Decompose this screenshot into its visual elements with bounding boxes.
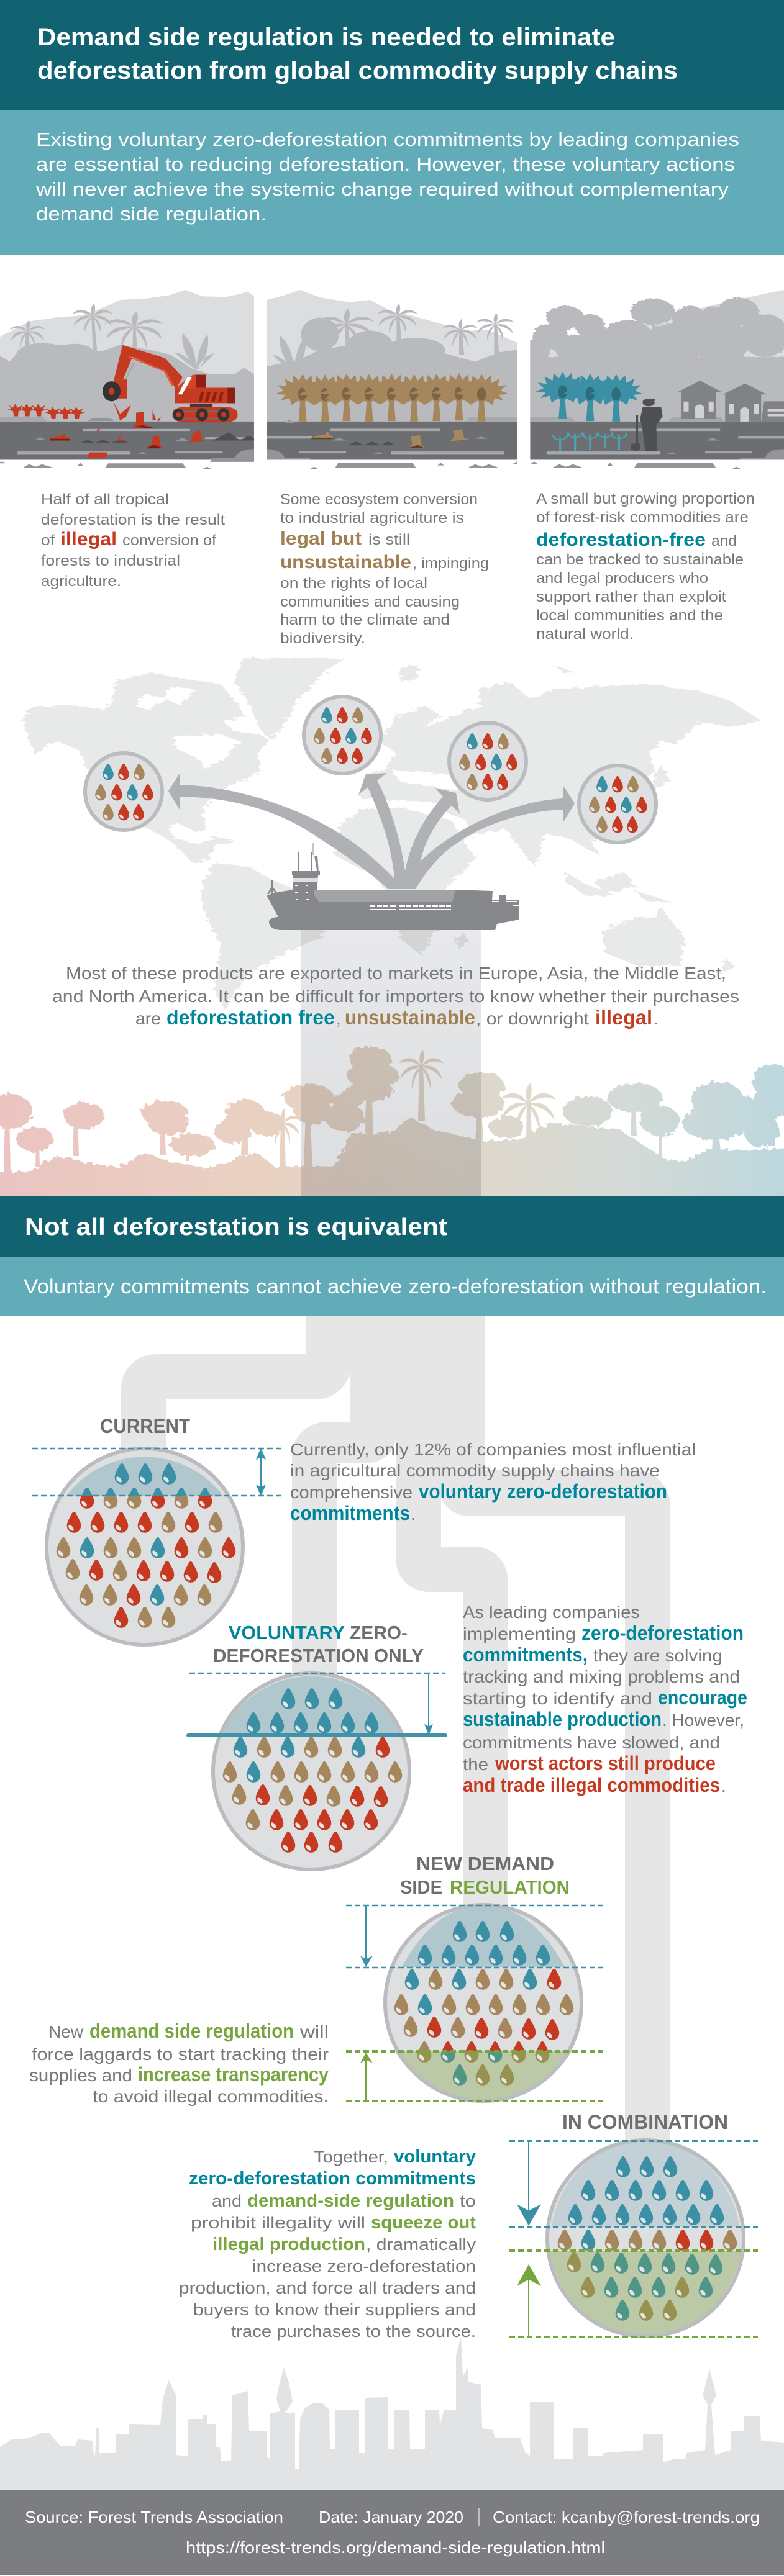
text: export markets: deforestation free xyxy=(166,1006,335,1029)
text: deforestation-free: and legal producers who xyxy=(536,570,708,587)
text: in combination: trace purchases to the source. xyxy=(231,2322,476,2341)
text: voluntary only: tracking and mixing problems and xyxy=(463,1667,740,1686)
text: export markets: , xyxy=(336,1009,341,1028)
text: illegal conversion: deforestation is the result xyxy=(41,512,225,528)
text: deforestation-free: deforestation-free xyxy=(536,530,706,550)
arrow: to Asia xyxy=(404,786,575,889)
text: deforestation-free: support rather than exploit xyxy=(536,589,726,605)
text: illegal conversion: conversion of xyxy=(122,532,216,549)
text: legal but unsustainable xyxy=(280,491,489,647)
market circle: Asia xyxy=(579,766,656,843)
text: demand side regulation xyxy=(29,2020,329,2106)
text: legal but unsustainable: communities and causing xyxy=(280,594,460,610)
text: legal but unsustainable: unsustainable xyxy=(280,552,411,572)
text: voluntary only: . However, xyxy=(662,1711,744,1730)
panel: unsustainable plantation scene xyxy=(267,290,517,469)
world map background xyxy=(22,658,760,1010)
text: illegal conversion: forests to industrial xyxy=(41,553,180,569)
text: deforestation-free: local communities and the xyxy=(536,607,723,624)
forest silhouette band xyxy=(0,1046,784,1211)
heading: new demand side regulation: REGULATION xyxy=(450,1876,570,1898)
text: export markets: . xyxy=(654,1009,659,1028)
heading: voluntary zero-deforestation only: ZERO- xyxy=(350,1622,408,1643)
text: voluntary only: commitments have slowed, and xyxy=(463,1733,720,1752)
text: voluntary only: zero-deforestation xyxy=(581,1622,744,1644)
text: export markets: are xyxy=(135,1009,161,1028)
text: current: Currently, only 12% of companies most influential xyxy=(290,1440,696,1459)
text: deforestation-free: can be tracked to sustainable xyxy=(536,551,744,568)
header: main title: Demand side regulation is needed to eliminate xyxy=(37,24,615,51)
heading: new demand side regulation: NEW DEMAND xyxy=(416,1853,554,1874)
text: voluntary only: implementing xyxy=(463,1624,576,1643)
text: current: comprehensive xyxy=(290,1483,413,1502)
text: illegal conversion xyxy=(41,491,225,590)
text: legal but unsustainable: harm to the climate and xyxy=(280,612,450,628)
text: in combination: squeeze out xyxy=(371,2213,476,2233)
footer: https://forest-trends.org/demand-side-regulation.html xyxy=(186,2538,605,2557)
market circle: Middle East xyxy=(449,723,526,800)
text: demand side regulation: demand side regulation xyxy=(89,2020,294,2042)
heading: voluntary zero-deforestation only xyxy=(213,1622,424,1666)
text: voluntary only: . xyxy=(721,1776,726,1796)
text: in combination xyxy=(179,2147,476,2341)
text: deforestation-free: A small but growing proportion xyxy=(536,490,755,507)
text: in combination: , dramatically xyxy=(366,2235,476,2254)
text: in combination: illegal production xyxy=(212,2235,365,2254)
panel: illegal conversion scene xyxy=(0,290,254,469)
intro text panel: Existing voluntary zero-deforestation commitments by leading companies xyxy=(36,129,739,150)
text: demand side regulation: will xyxy=(299,2022,329,2041)
market circle: North America xyxy=(85,753,162,830)
intro text panel: demand side regulation. xyxy=(36,203,267,225)
header: main title xyxy=(0,0,784,110)
text: current xyxy=(290,1440,696,1524)
text: voluntary only: commitments, xyxy=(463,1643,588,1666)
text: voluntary only: encourage xyxy=(658,1686,747,1709)
footer: Date: January 2020 xyxy=(319,2508,463,2526)
heading: voluntary zero-deforestation only: VOLUNTARY xyxy=(229,1622,345,1643)
text: in combination: zero-deforestation commitments xyxy=(189,2169,476,2189)
section heading xyxy=(0,1196,784,1257)
text: voluntary only: sustainable production xyxy=(463,1708,662,1730)
text: legal but unsustainable: on the rights of local xyxy=(280,575,427,592)
heading: new demand side regulation: SIDE xyxy=(400,1876,442,1898)
text: voluntary only: starting to identify and xyxy=(463,1689,652,1708)
section subheading xyxy=(0,1257,784,1316)
text: legal but unsustainable: biodiversity. xyxy=(280,630,365,647)
arrow: regulation share xyxy=(360,2053,373,2101)
export arrows xyxy=(168,773,575,889)
section subheading: Voluntary commitments cannot achieve zero-deforestation without regulation. xyxy=(24,1275,767,1298)
intro text panel: will never achieve the systemic change required without complementary xyxy=(35,178,729,200)
footer: Source: Forest Trends Association xyxy=(25,2508,283,2526)
text: export markets: Most of these products are exported to markets in Europe, Asia, the Middle East, xyxy=(66,964,726,983)
text: legal but unsustainable: Some ecosystem conversion xyxy=(280,491,478,508)
arrow: regulation share combined xyxy=(517,2264,541,2337)
text: legal but unsustainable: to industrial agriculture is xyxy=(280,510,464,526)
circle diagram: demand side regulation xyxy=(346,1905,603,2101)
text: deforestation-free: natural world. xyxy=(536,626,634,643)
city skyline xyxy=(0,2336,784,2490)
text: deforestation-free xyxy=(536,490,755,643)
text: current: in agricultural commodity supply chains have xyxy=(290,1461,660,1480)
arrow: voluntary share xyxy=(424,1673,433,1735)
text: in combination: to xyxy=(460,2192,476,2210)
text: current: voluntary zero-deforestation xyxy=(419,1480,667,1503)
text: in combination: production, and force all traders and xyxy=(179,2279,476,2297)
text: illegal conversion: Half of all tropical xyxy=(41,491,169,508)
circle diagram: current xyxy=(32,1448,283,1645)
text: in combination: and xyxy=(212,2192,242,2210)
arrow: to North America xyxy=(168,774,401,889)
text: demand side regulation: force laggards to start tracking their xyxy=(32,2045,329,2064)
circle diagram: voluntary only xyxy=(188,1673,445,1869)
text: voluntary only: the xyxy=(463,1755,488,1774)
arrow: to Middle East xyxy=(403,788,460,889)
text: illegal conversion: illegal xyxy=(60,529,117,549)
intro text panel xyxy=(0,110,784,255)
text: voluntary only: and trade illegal commodities xyxy=(463,1774,720,1796)
text: deforestation-free: of forest-risk commodities are xyxy=(536,509,749,526)
arrow: to Europe xyxy=(358,773,408,889)
text: in combination: voluntary xyxy=(394,2147,476,2167)
heading: voluntary zero-deforestation only: DEFORESTATION ONLY xyxy=(213,1645,424,1666)
arrow: voluntary share combined xyxy=(517,2141,541,2226)
text: in combination: demand-side regulation xyxy=(247,2191,454,2211)
text: legal but unsustainable: , impinging xyxy=(413,555,489,572)
text: export markets xyxy=(52,964,739,1029)
intro text panel: are essential to reducing deforestation. However, these voluntary actions xyxy=(36,153,735,175)
text: current: . xyxy=(411,1504,416,1524)
heading: new demand side regulation xyxy=(400,1853,570,1898)
text: deforestation-free: and xyxy=(711,533,737,549)
text: export markets: , or downright xyxy=(476,1009,589,1028)
text: illegal conversion: of xyxy=(41,532,55,549)
text: export markets: illegal xyxy=(595,1006,652,1029)
panel: deforestation-free scene xyxy=(520,290,784,469)
text: legal but unsustainable: is still xyxy=(368,531,410,548)
header: main title: deforestation from global commodity supply chains xyxy=(37,57,678,84)
market circle: Europe xyxy=(304,697,381,774)
vertical pipe stripe xyxy=(301,930,481,1196)
text: in combination: buyers to know their suppliers and xyxy=(193,2300,476,2319)
cargo ship xyxy=(267,843,519,930)
text: demand side regulation: supplies and xyxy=(29,2066,132,2085)
circle diagram: in combination xyxy=(509,2140,758,2337)
section heading: Not all deforestation is equivalent xyxy=(25,1214,447,1241)
text: demand side regulation: New xyxy=(48,2022,84,2041)
text: demand side regulation: to avoid illegal commodities. xyxy=(93,2087,329,2106)
text: in combination: Together, xyxy=(314,2148,388,2166)
arrow: voluntary share with regulation xyxy=(360,1905,373,1967)
footer: Contact: kcanby@forest-trends.org xyxy=(493,2508,760,2526)
text: current: commitments xyxy=(290,1502,410,1524)
pipes background xyxy=(121,1316,670,2173)
text: voluntary only: As leading companies xyxy=(463,1602,640,1622)
text: legal but unsustainable: legal but xyxy=(280,528,362,549)
text: export markets: unsustainable xyxy=(345,1006,475,1029)
heading: current: CURRENT xyxy=(100,1415,190,1437)
heading: in combination: IN COMBINATION xyxy=(562,2111,728,2133)
text: voluntary only: they are solving xyxy=(593,1646,722,1665)
text: voluntary only: worst actors still produce xyxy=(495,1752,716,1774)
text: in combination: prohibit illegality will xyxy=(191,2213,365,2232)
text: export markets: and North America. It can be difficult for importers to know whether their purchases xyxy=(52,987,739,1006)
text: in combination: increase zero-deforestation xyxy=(252,2257,476,2275)
arrow: current share xyxy=(257,1448,265,1496)
text: voluntary only xyxy=(463,1602,747,1796)
text: illegal conversion: agriculture. xyxy=(41,573,121,590)
text: demand side regulation: increase transparency xyxy=(138,2063,329,2086)
footer xyxy=(0,2490,784,2575)
